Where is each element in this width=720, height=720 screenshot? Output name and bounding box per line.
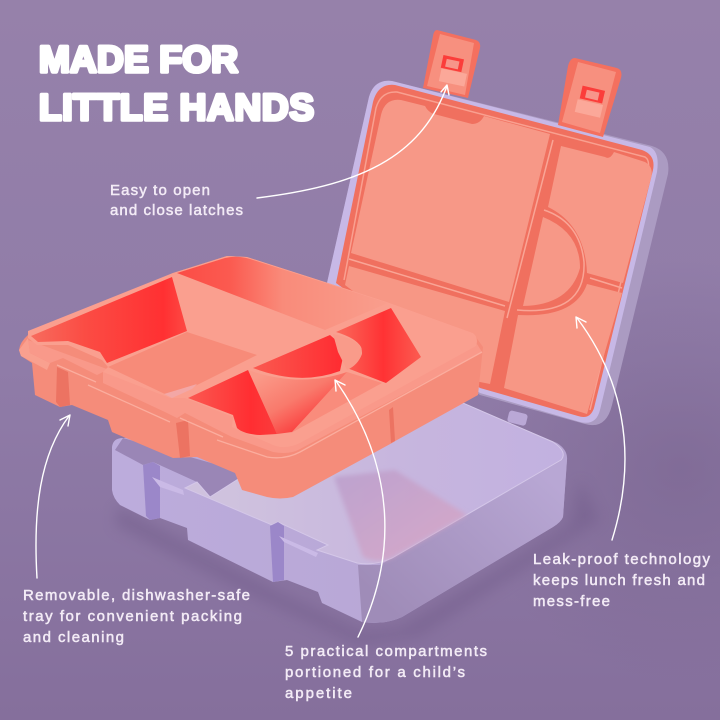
callout: latches: and close latches <box>110 202 243 219</box>
pink tray reflection <box>334 470 467 561</box>
arrow: compartments <box>335 380 385 637</box>
base latch tab 1 <box>152 477 184 495</box>
tray flange <box>19 338 50 370</box>
callout: leak-proof: mess-free <box>533 593 610 610</box>
base interior shadow <box>115 438 250 497</box>
compartment 4 right wall <box>291 372 382 433</box>
tray top surface <box>28 256 477 447</box>
title <box>39 39 314 128</box>
base interior floor <box>185 403 563 564</box>
compartment 2 <box>177 257 388 330</box>
title: LITTLE HANDS <box>39 87 314 128</box>
callout: latches <box>110 182 243 219</box>
lid seal ridge <box>344 92 649 410</box>
shadow under box <box>115 480 600 645</box>
lid panel: large <box>351 100 550 302</box>
title: MADE FOR <box>39 39 238 80</box>
callout: removable tray: tray for convenient packing <box>23 608 242 625</box>
arrow: latches <box>257 85 449 198</box>
lavender box base <box>112 403 567 623</box>
callout: latches: Easy to open <box>110 182 210 199</box>
lid outer shell <box>327 81 668 425</box>
half-moon light wall <box>333 334 362 370</box>
half-moon compartment <box>253 335 345 378</box>
base outer walls <box>112 403 567 623</box>
callout: compartments <box>285 643 487 702</box>
base right wall <box>358 458 567 623</box>
lid inner seal <box>336 85 654 417</box>
tray rim front face <box>28 340 482 453</box>
compartment 4 left red wall <box>188 370 277 435</box>
hinge <box>507 410 528 426</box>
compartment 4 back wall <box>248 370 347 434</box>
callout: leak-proof <box>533 551 710 610</box>
lid ridge detail <box>349 140 622 318</box>
callout: compartments: appetite <box>285 685 352 702</box>
lid panel: lower left <box>345 266 505 384</box>
base latch recess 1 <box>143 462 160 520</box>
arrow: leak-proof <box>576 317 625 540</box>
latch 2 <box>558 58 622 137</box>
callout: removable tray <box>23 587 250 646</box>
lid rim highlight <box>327 81 658 423</box>
callout: compartments: 5 practical compartments <box>285 643 487 660</box>
callout: leak-proof: keeps lunch fresh and <box>533 572 705 589</box>
compartment 3 <box>336 308 421 383</box>
open lid <box>327 30 668 425</box>
compartment 1 floor <box>108 332 257 395</box>
tray body <box>19 256 483 498</box>
base latch tab 2 <box>279 536 318 557</box>
tray side notches <box>56 367 395 458</box>
tray ledge highlights <box>57 352 482 458</box>
lid panel: D shape <box>523 217 580 306</box>
arrow: tray <box>36 415 70 578</box>
compartment 1 lavender reflection <box>164 384 197 398</box>
callout: leak-proof: Leak-proof technology <box>533 551 710 568</box>
lid panel: top right <box>548 146 652 283</box>
base latch recess 2 <box>270 522 284 582</box>
callout: removable tray: and cleaning <box>23 629 124 646</box>
compartment 1 red wall <box>31 277 187 363</box>
callout: removable tray: Removable, dishwasher-safe <box>23 587 250 604</box>
latch 1 <box>423 30 480 98</box>
coral removable tray <box>19 256 483 498</box>
lid panel: lower right <box>504 284 622 414</box>
callout: compartments: portioned for a child’s <box>285 664 465 681</box>
